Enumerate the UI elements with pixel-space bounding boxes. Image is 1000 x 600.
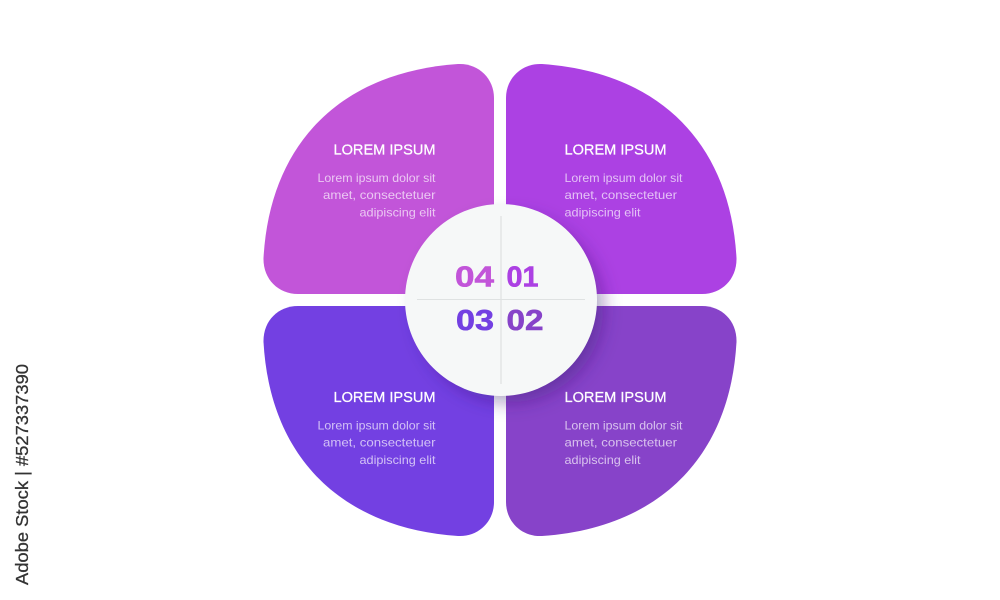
heading: panel 01: LOREM IPSUM: [564, 142, 666, 158]
panel: 04 top left: [263, 64, 494, 294]
number 03: 03: [456, 305, 494, 337]
text block: panel 02: Lorem ipsum dolor sit: [564, 418, 683, 432]
text block: panel 03: adipiscing elit: [360, 453, 436, 467]
text block: panel 01: Lorem ipsum dolor sit: [564, 171, 683, 185]
text block: panel 04: amet, consectetuer: [323, 188, 436, 202]
text block: panel 04: Lorem ipsum dolor sit: [318, 171, 436, 185]
text block: panel 03: [318, 418, 436, 467]
text block: panel 03: amet, consectetuer: [323, 436, 436, 450]
text block: panel 02: amet, consectetuer: [564, 436, 677, 450]
heading: panel 04: LOREM IPSUM: [334, 142, 436, 158]
text block: panel 02: [564, 418, 683, 467]
text block: panel 03: Lorem ipsum dolor sit: [318, 418, 436, 432]
heading: panel 02: LOREM IPSUM: [564, 389, 666, 406]
text block: panel 01: amet, consectetuer: [564, 188, 677, 202]
panel: 01 top right: [506, 64, 737, 294]
central hub: [405, 204, 603, 402]
text block: panel 01: [564, 171, 683, 220]
number 01: 01: [506, 262, 538, 294]
panel: 02 bottom right: [506, 306, 737, 536]
panel: 03 bottom left: [263, 306, 494, 536]
text block: panel 04: adipiscing elit: [360, 206, 436, 220]
text block: panel 02: adipiscing elit: [564, 453, 641, 467]
text block: panel 04: [318, 171, 436, 220]
number 04: 04: [455, 262, 494, 294]
number 02: 02: [506, 305, 544, 337]
side credit label: Adobe Stock | #527337390: [12, 364, 32, 585]
text block: panel 01: adipiscing elit: [564, 206, 641, 220]
heading: panel 03: LOREM IPSUM: [334, 389, 436, 406]
